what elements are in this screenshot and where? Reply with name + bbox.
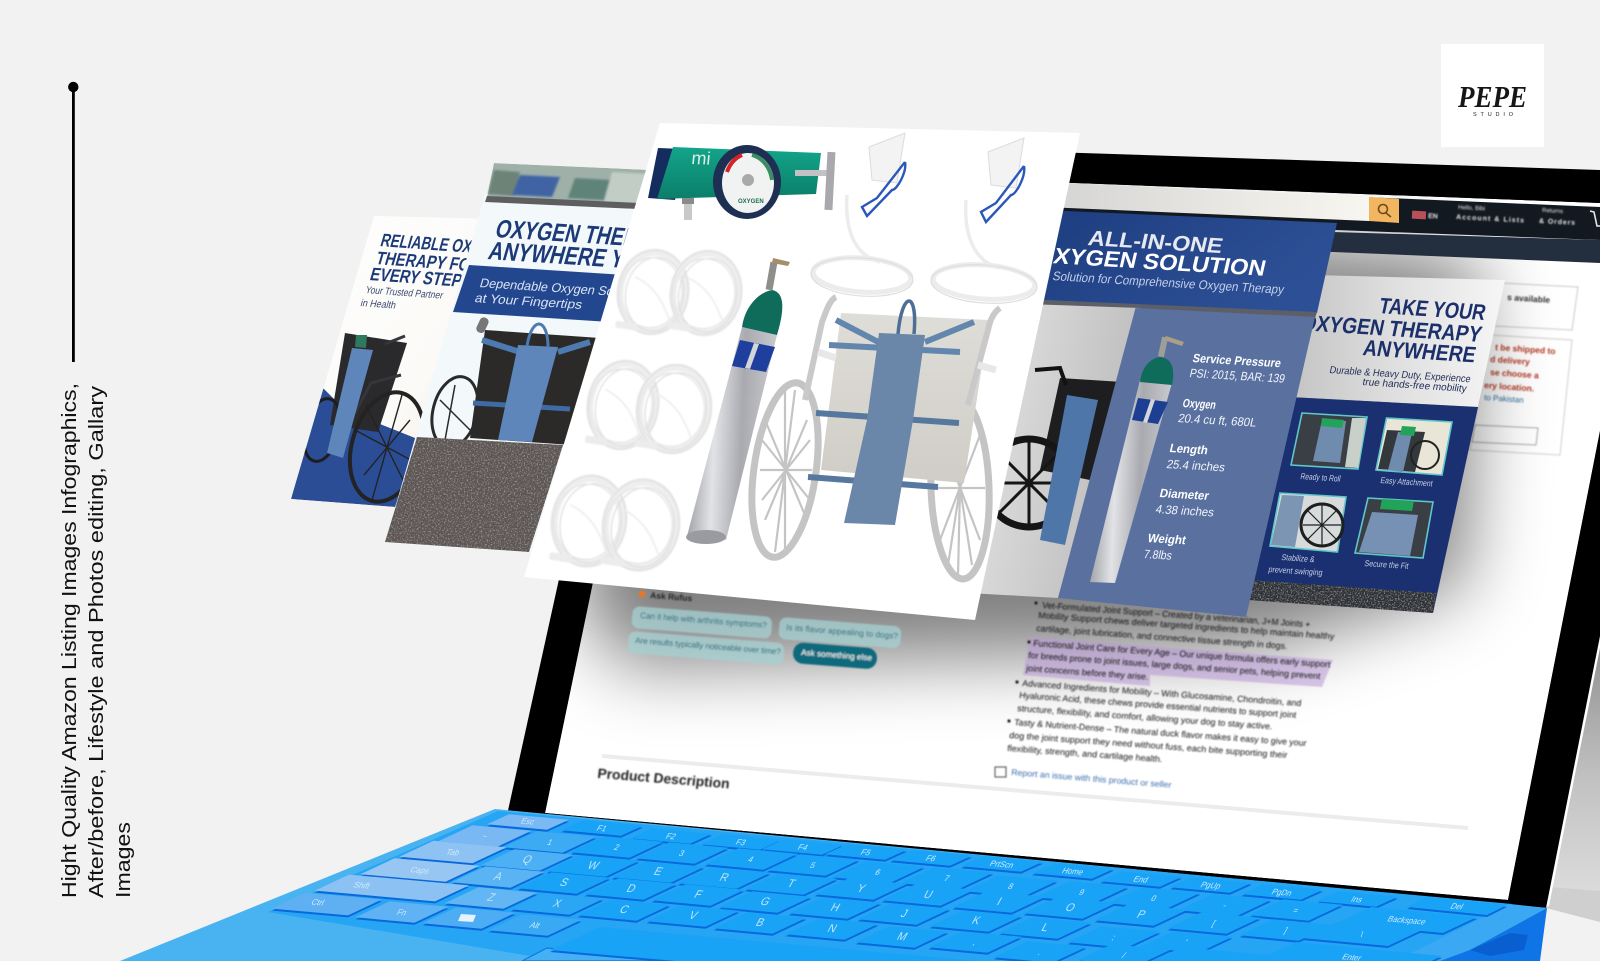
oxygen mask 1 (810, 133, 914, 300)
key labels: - (1221, 900, 1229, 910)
key labels: P (1134, 909, 1148, 921)
key labels: H (828, 902, 842, 914)
thumbnail captions: Secure the Fit (1364, 558, 1410, 571)
ask rufus chips: Ask Rufus (650, 590, 693, 603)
product bullet list: joint concerns before they arise. (1025, 663, 1149, 682)
heading: OXYGEN THERAPY (1299, 310, 1484, 347)
heading: OXYGEN THERAPY (492, 215, 682, 255)
heading (485, 215, 695, 278)
specification list: 25.4 inches (1165, 457, 1226, 474)
card 2: oxygen therapy anywhere you go (385, 163, 646, 552)
heading: THERAPY FOR (374, 247, 484, 276)
right-side delivery panel: s available (1507, 292, 1551, 305)
key labels: Home (1060, 865, 1086, 877)
amazon top navigation bar: Account & Lists (1456, 214, 1524, 225)
right-side delivery panel (1470, 283, 1578, 455)
oxygen cylinder (1090, 336, 1184, 583)
key labels: 9 (1077, 887, 1087, 897)
key labels: N (825, 923, 839, 935)
key labels: Ins (1349, 894, 1365, 904)
product bullet list: Vet-Formulated Joint Support – Created by a veterinarian, J+M Joints + (1042, 600, 1311, 629)
key labels: C (617, 904, 631, 916)
key labels: F2 (664, 831, 678, 841)
key labels: O (1063, 902, 1077, 914)
key labels: J (898, 908, 910, 920)
key labels: PgDn (1270, 887, 1294, 898)
key labels: ; (1110, 932, 1118, 942)
key labels: Esc (519, 816, 537, 826)
amazon top navigation bar (1063, 183, 1600, 263)
key labels: D (624, 883, 638, 895)
function row (487, 814, 1507, 915)
thumbnail captions (1268, 471, 1434, 578)
key labels: 6 (873, 867, 883, 877)
qwerty row (400, 841, 1422, 946)
thumbnail: secure the fit (1355, 498, 1433, 558)
key labels: . (1036, 947, 1044, 957)
key labels: Ctrl (309, 897, 327, 907)
key labels: [ (1210, 918, 1218, 928)
key labels: X (550, 898, 564, 910)
key labels: V (686, 910, 700, 922)
key labels: \ (1358, 929, 1366, 939)
key labels: 0 (1149, 893, 1159, 903)
key labels: L (1039, 922, 1052, 934)
key labels: F4 (796, 842, 810, 852)
product bullet list: Product Description (597, 765, 731, 792)
right-side delivery panel: se choose a (1490, 367, 1539, 380)
heading: OXYGEN SOLUTION (1033, 242, 1269, 281)
thumbnail: ready to roll (1291, 413, 1367, 469)
product bullet list: structure, flexibility, and comfort, allowing your dog to stay active. (1017, 703, 1273, 731)
key labels: 2 (612, 842, 622, 852)
card 5: take your oxygen therapy anywhere (1200, 274, 1505, 613)
trackpad (522, 948, 691, 961)
key labels: Tab (444, 847, 462, 857)
key labels: W (585, 860, 601, 872)
key labels: End (1132, 874, 1151, 885)
heading (1033, 226, 1269, 281)
key labels: PgUp (1199, 880, 1223, 891)
thumbnail: easy attachment (1376, 418, 1452, 475)
key labels: Shift (352, 880, 373, 891)
key labels: 1 (545, 837, 555, 847)
wheelchair photo (997, 366, 1116, 545)
logo: Pepe Studio: STUDIO (1473, 112, 1514, 118)
subheading: true hands-free mobility (1361, 377, 1469, 395)
key labels: U (921, 889, 935, 901)
band subtitle (473, 275, 652, 312)
vertical caption text (59, 383, 135, 898)
thumbnail captions: Stabilize & (1281, 552, 1316, 564)
heading: ALL-IN-ONE (1086, 226, 1225, 258)
specification list: Oxygen (1181, 396, 1217, 412)
key labels: Caps (408, 865, 432, 876)
right-side delivery panel: d delivery (1490, 354, 1530, 367)
heading: RELIABLE OXYGEN (378, 229, 513, 259)
laptop screen bezel (507, 139, 1600, 908)
highlighted bullet background (1023, 637, 1333, 687)
specification list: PSI: 2015, BAR: 139 (1188, 366, 1287, 386)
specification list: Weight (1146, 531, 1187, 547)
key labels: ~ (480, 831, 490, 841)
key labels: A (491, 871, 505, 883)
ask rufus chips: Are results typically noticeable over time? (635, 636, 782, 656)
oxygen mask 2 (930, 138, 1038, 307)
vertical caption text: Images (113, 822, 135, 898)
blue floor and wheelchair with bag (291, 333, 422, 507)
heading: TAKE YOUR (1377, 293, 1488, 325)
slate spec panel (1058, 308, 1315, 617)
logo: Pepe Studio: PEPE (1457, 79, 1527, 114)
key labels: Z (485, 892, 497, 904)
key labels: 8 (1006, 881, 1016, 891)
heading (1299, 293, 1488, 367)
subheading (359, 285, 445, 312)
card 1: reliable oxygen therapy (291, 216, 478, 507)
key labels: M (894, 931, 910, 943)
key labels: 7 (942, 873, 952, 883)
product bullet list: Mobility Support chews deliver targeted ingredients to help maintain healthy (1038, 610, 1336, 641)
bottom row (272, 893, 1000, 961)
ask rufus chips (627, 590, 902, 670)
right-side delivery panel: to Pakistan (1484, 393, 1524, 405)
product bullet list: Functional Joint Care for Every Age – Our unique formula offers early support (1033, 638, 1332, 669)
ask rufus chips: Ask something else (801, 648, 873, 663)
card cast shadow (575, 170, 1480, 665)
key labels: E (651, 866, 665, 878)
asphalt ground (385, 437, 563, 552)
key labels: Backspace (1386, 914, 1429, 927)
key labels: I (994, 896, 1004, 908)
product bullet list: dog the joint support they need without fuss, each bite supporting their (1009, 730, 1288, 760)
blue band (453, 265, 625, 322)
icon: windows key (458, 914, 476, 922)
heading: ANYWHERE YOU GO (485, 237, 695, 278)
product bullet list: Tasty & Nutrient-Dense – The natural duck flavor makes it easy to give your (1014, 717, 1307, 748)
key labels: K (969, 915, 983, 927)
number row (438, 825, 1477, 933)
top background strip (485, 163, 650, 209)
key labels: F3 (734, 837, 748, 847)
vertical caption text: Hight Quality Amazon Listing Images Infographics, (59, 383, 81, 898)
specification list: Diameter (1158, 486, 1211, 503)
ask rufus chips: Is its flavor appealing to dogs? (786, 623, 899, 641)
home row (360, 858, 1442, 961)
oxygen regulator (648, 145, 835, 220)
product bullet list: for breeds prone to joint issues, large dogs, and senior pets, helping prevent (1028, 650, 1322, 681)
key labels: B (753, 917, 767, 929)
chair wheels (742, 379, 992, 580)
key labels: Del (1449, 901, 1465, 911)
subheading: in Health (359, 298, 398, 312)
nasal tubing coils (546, 245, 747, 576)
vertical caption text: After/before, Lifestyle and Photos editing, Gallary (86, 386, 108, 898)
subheading: Solution for Comprehensive Oxygen Therapy (1051, 269, 1286, 297)
key labels (309, 816, 1465, 961)
key labels: G (758, 896, 772, 908)
specification list: 4.38 inches (1154, 502, 1215, 519)
band subtitle: at Your Fingertips (473, 290, 584, 312)
key labels: S (557, 877, 571, 889)
key labels: F5 (859, 847, 873, 857)
key labels: = (1291, 905, 1301, 915)
wheelchair with bag (430, 317, 596, 444)
card 4: all-in-one oxygen solution (950, 209, 1337, 617)
specification list: 7.8lbs (1142, 547, 1173, 563)
key labels: 5 (808, 860, 818, 870)
amazon top navigation bar: Returns (1542, 208, 1563, 215)
product bullet list: Report an issue with this product or seller (1011, 767, 1172, 790)
amazon top navigation bar: EN (1428, 213, 1438, 221)
key labels: Fn (395, 907, 409, 917)
band subtitle: Dependable Oxygen Solutions (478, 275, 652, 301)
amazon top navigation bar: Hello, Bibi (1458, 205, 1485, 212)
key labels: R (717, 872, 731, 884)
heading: EVERY STEP (368, 263, 465, 291)
oxygen regulator: OXYGEN (738, 199, 764, 205)
right-side delivery panel: t be shipped to (1495, 342, 1556, 356)
right-side delivery panel: ery location. (1484, 380, 1535, 393)
key labels: ' (1183, 937, 1190, 947)
key labels: Alt (528, 920, 543, 930)
amazon top navigation bar: & Orders (1539, 218, 1575, 227)
kickstand (1546, 640, 1600, 922)
product bullet list: cartilage, joint lubrication, and connective tissue strength in dogs. (1036, 623, 1288, 651)
thumbnail captions: Ready to Roll (1300, 471, 1342, 484)
key labels: T (785, 878, 797, 890)
specification list: Service Pressure (1191, 351, 1283, 370)
key labels: 4 (746, 854, 756, 864)
subheading: Your Trusted Partner (364, 285, 445, 302)
product bullet list: Advanced Ingredients for Mobility – With Glucosamine, Chondroitin, and (1022, 678, 1302, 708)
specification list (1142, 351, 1287, 563)
specification list: Length (1168, 441, 1209, 457)
key labels: F1 (595, 823, 609, 833)
key labels: 3 (677, 848, 687, 858)
subheading: Durable & Heavy Duty, Experience (1328, 365, 1472, 385)
shift row (315, 875, 1342, 961)
specification list: 20.4 cu ft, 680L (1177, 411, 1258, 430)
product bullet list: Hyaluronic Acid, these chews provide essential nutrients to support joint (1019, 690, 1298, 720)
thumbnail captions: Easy Attachment (1380, 475, 1434, 488)
keys (272, 814, 1507, 961)
key labels: F6 (924, 853, 938, 863)
wheelchair with oxygen bag (742, 297, 1000, 580)
oxygen regulator: mi (691, 148, 712, 169)
laptop screen: Amazon product page (545, 168, 1600, 900)
ask rufus chips: Can it help with arthritis symptoms? (640, 611, 768, 630)
product bullet list (597, 600, 1336, 792)
side caption line with dot (68, 82, 79, 362)
keyboard cover (120, 809, 1547, 961)
oxygen cylinder (686, 258, 790, 544)
key labels: / (1120, 950, 1128, 960)
product bullet list: flexibility, strength, and cartilage health. (1007, 743, 1163, 764)
key labels: Y (854, 883, 868, 895)
key labels: , (971, 937, 979, 947)
heading: ANYWHERE (1361, 335, 1478, 367)
thumbnail: stabilize (1270, 493, 1346, 552)
heading (368, 229, 513, 291)
key labels: PrtScn (988, 858, 1016, 870)
logo: Pepe Studio (1441, 44, 1544, 147)
key labels: Q (520, 854, 534, 866)
key labels: ] (1282, 925, 1290, 935)
card 3: white product kit (524, 123, 1080, 620)
key labels: F (692, 889, 704, 901)
subheading (1328, 365, 1472, 395)
thumbnail captions: prevent swinging (1268, 564, 1324, 578)
